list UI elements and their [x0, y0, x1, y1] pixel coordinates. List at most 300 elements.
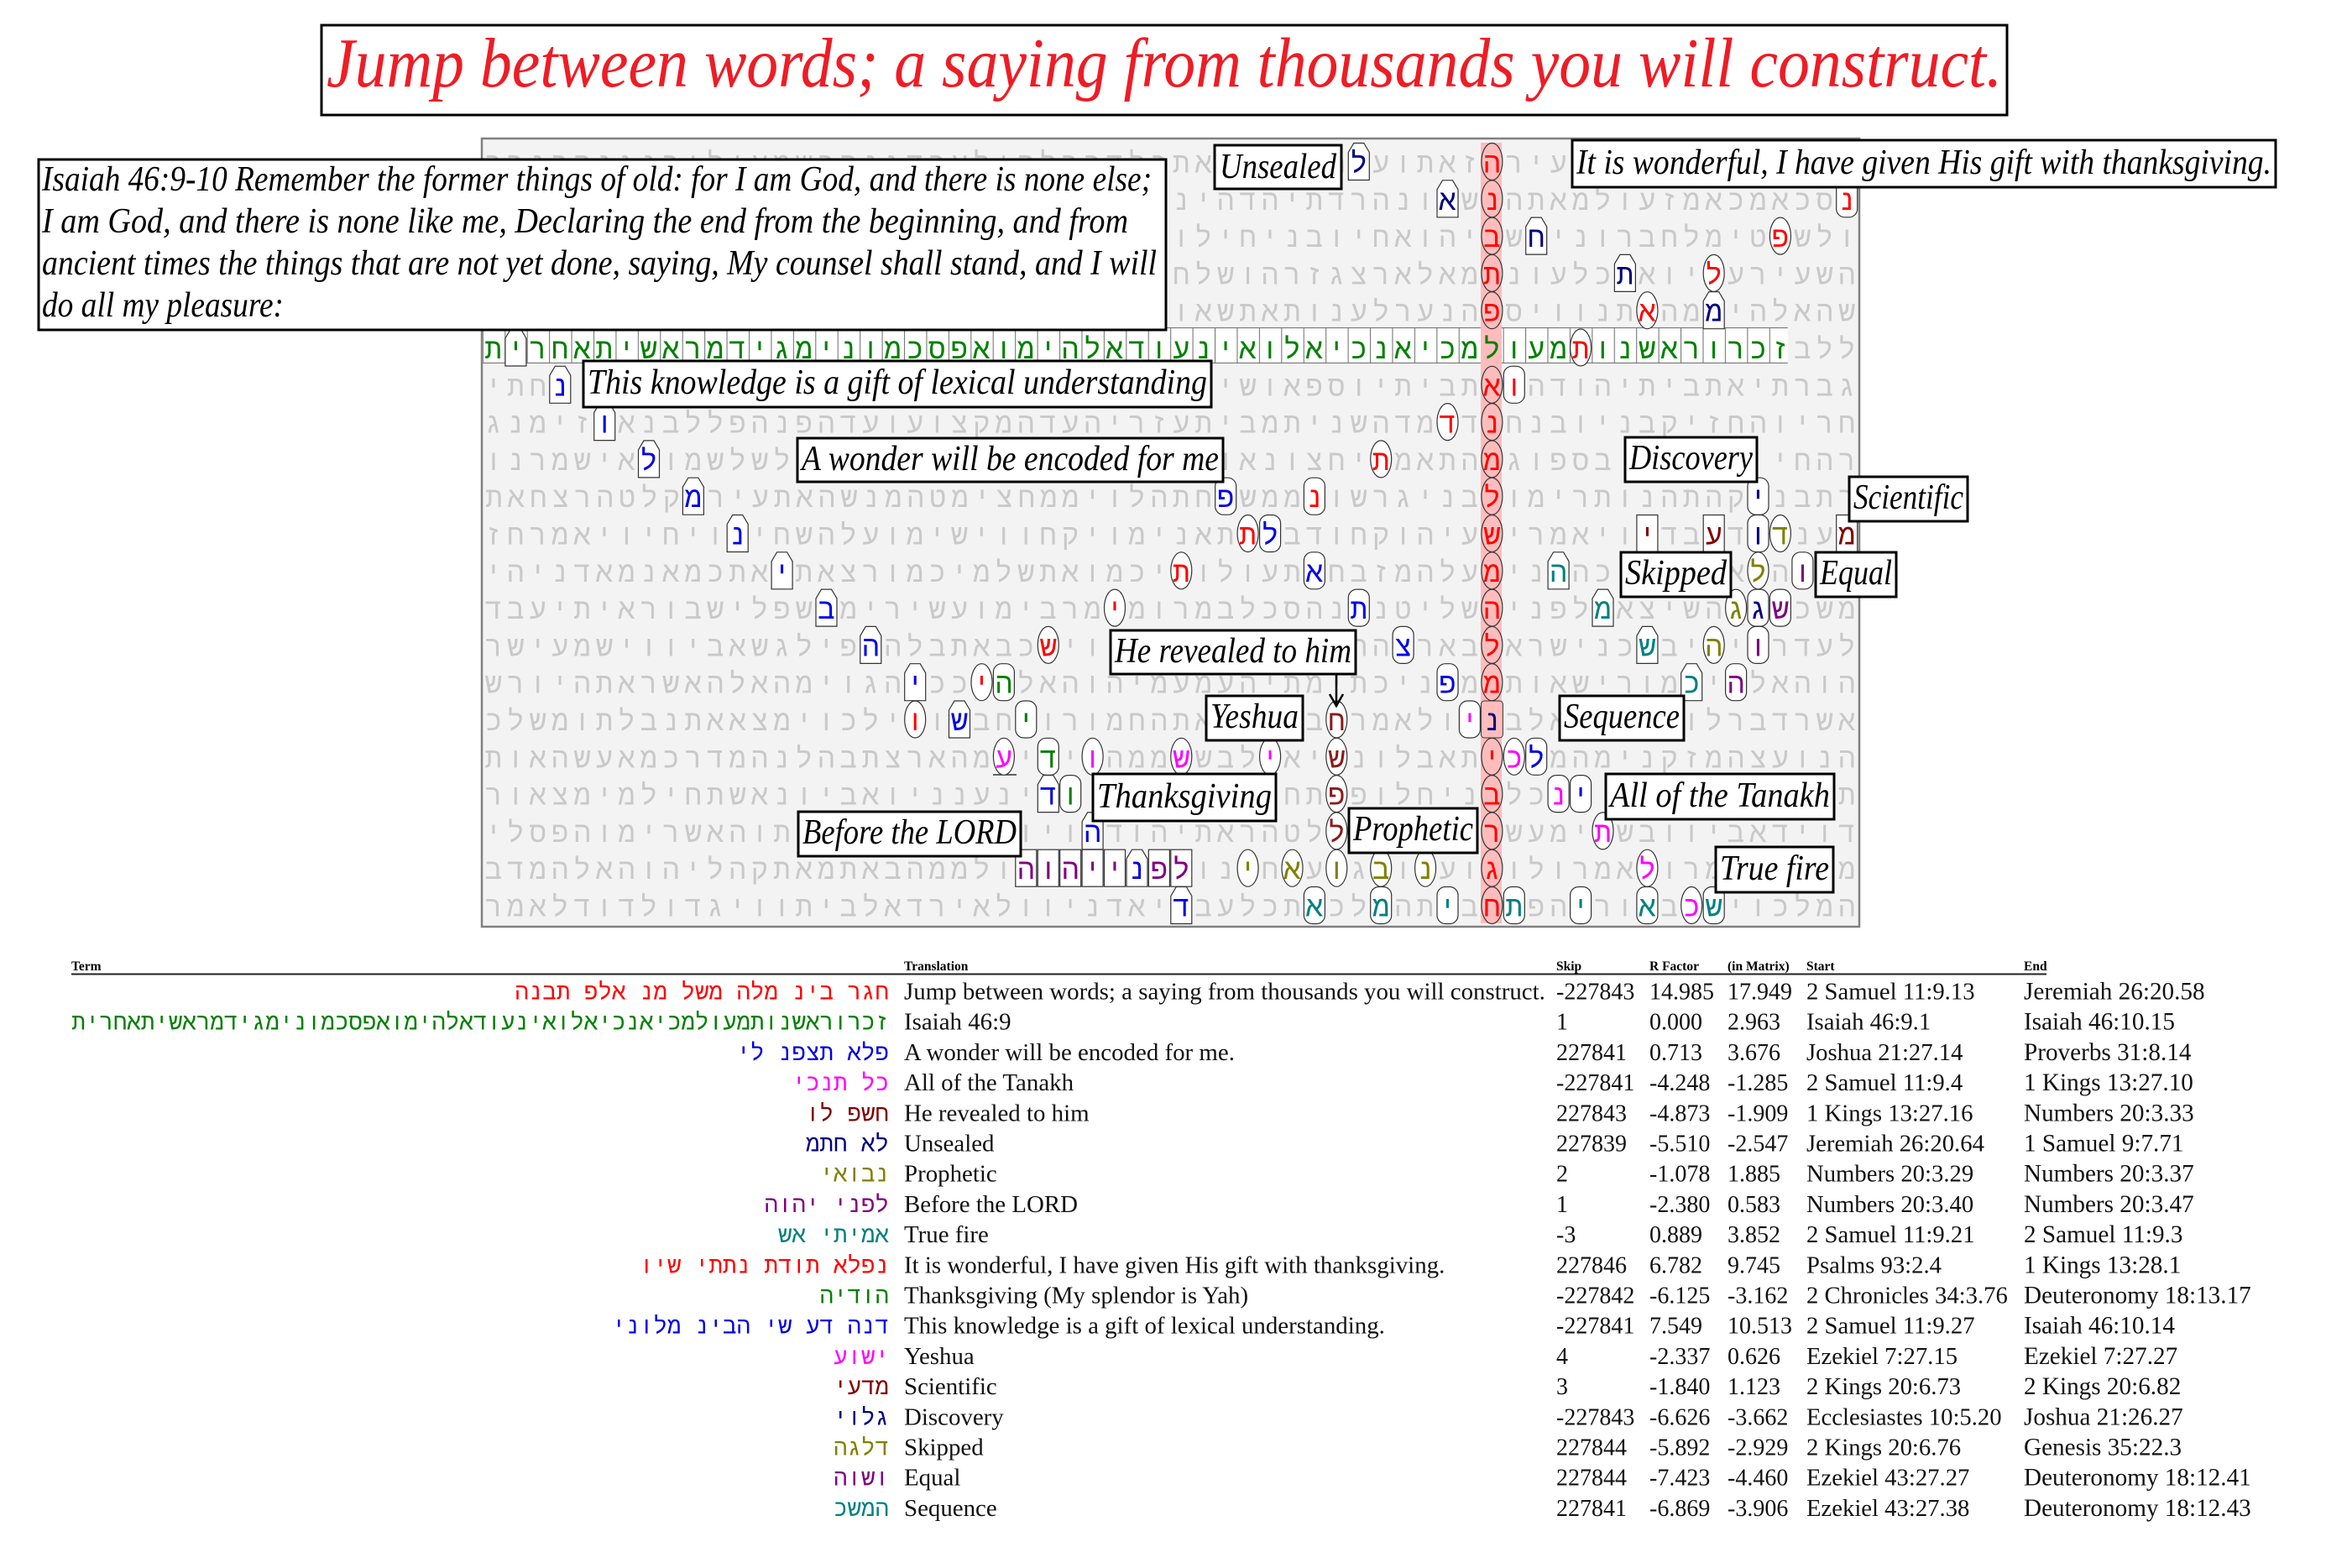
matrix grey letters: מענדודעבדיויאמרי	[1505, 522, 1860, 554]
skip markers: Yeshua and All of the Tanakh (magenta): נ	[1550, 782, 1567, 814]
skip markers: True fire (teal): י	[1572, 893, 1589, 925]
matrix grey letters: ללב	[1794, 335, 1860, 368]
skip markers: Prophetic (olive): א	[1283, 856, 1301, 888]
row: Isaiah 46:9	[71, 1009, 2175, 1037]
skip markers: Skipped (olive): ל	[1749, 558, 1767, 591]
skip markers: Jump between words (red)	[905, 180, 1858, 740]
skip markers: A wonder (blue): צ	[1394, 633, 1412, 665]
row: Scientific: -1.840	[1649, 1374, 1710, 1400]
row: Yeshua: Ezekiel 7:27.15	[1806, 1343, 1957, 1370]
row: Jump between words: 2 Samuel 11:9.13	[1806, 979, 1975, 1006]
skip markers: Jump between words (red): ד	[1439, 410, 1456, 442]
row: Unsealed: 1 Samuel 9:7.71	[2024, 1130, 2184, 1157]
row: He revealed: 227843	[1556, 1100, 1627, 1126]
row: Discovery: Discovery	[904, 1403, 1004, 1430]
skip markers: This knowledge (blue): ב	[818, 596, 835, 628]
row: True fire: 0.889	[1649, 1222, 1702, 1248]
skip markers: True fire (teal): י	[1439, 893, 1456, 925]
row: Isaiah 46:9: 1	[1556, 1010, 1568, 1036]
skip markers: Prophetic (olive): י	[1239, 856, 1257, 888]
skip markers: Before the LORD (purple): ה	[1062, 856, 1079, 888]
row: Before the LORD: -2.380	[1649, 1192, 1710, 1218]
row: It is wonderful: נפלא תודת נתתי שיו	[640, 1254, 889, 1280]
skip markers: He revealed to him (maroon)	[1326, 701, 1347, 851]
skip markers: Before the LORD (purple): י	[1084, 856, 1101, 888]
skip markers: Sequence (teal): ה	[1550, 559, 1567, 591]
row: Equal: 227844	[1556, 1466, 1627, 1492]
row: Equal	[834, 1465, 2251, 1493]
skip markers: Jump between words (red): ש	[1040, 633, 1057, 665]
label: This knowledge: This knowledge is a gift of lexical understanding	[588, 363, 1207, 402]
skip markers: It is wonderful (red, central column): ל	[1483, 632, 1501, 665]
skip markers: A wonder (blue): ל	[1262, 520, 1278, 554]
row of Isaiah 46:9 cells: זכרוראשנותמעולמכיאנכיאלואינעודאלהימואפסכמונימגידמראשיתאחרית	[485, 335, 1794, 368]
skip markers: Thanksgiving (green): ד	[1040, 745, 1057, 776]
row: Unsealed	[806, 1130, 2184, 1158]
row: Sequence: Deuteronomy 18:12.43	[2024, 1495, 2251, 1522]
row: Yeshua: ישוע	[834, 1346, 889, 1372]
matrix grey letters: מרולאמרולו	[1506, 855, 1728, 888]
skip markers: Thanksgiving (green): ה	[996, 671, 1012, 703]
row: Thanksgiving: Thanksgiving (My splendor is Yah)	[904, 1283, 1248, 1309]
skip markers: Scientific (maroon)	[1637, 515, 1858, 554]
label: Equal: Equal	[1819, 554, 1892, 593]
matrix grey letters: מאלארצגזרהושלח	[1173, 260, 1483, 293]
skip markers: Scientific (maroon): מ	[1838, 522, 1855, 554]
matrix grey letters: נחתי	[485, 373, 574, 405]
row: This knowledge: Isaiah 46:10.14	[2024, 1313, 2175, 1340]
skip markers: It is wonderful (red, central column): ב	[1483, 224, 1501, 256]
row: Sequence: -6.869	[1649, 1496, 1710, 1522]
callout: Isaiah 46:9-10 quotation: ancient times the things that are not yet done, saying, My counsel shall stand, and I will	[42, 244, 1157, 283]
matrix grey letters: שליטנתנהסכלבמרומימרבימועשירימבשפלישבוראיתיעבד	[485, 595, 1483, 628]
skip markers: Jump between words (red): פ	[1772, 224, 1789, 256]
skip markers: A wonder (blue): נ	[1483, 708, 1501, 740]
row: Discovery: Ecclesiastes 10:5.20	[1806, 1403, 2002, 1430]
row: This knowledge: -227841	[1556, 1314, 1634, 1340]
row: Discovery: -227843	[1556, 1404, 1634, 1430]
row: Yeshua: 0.626	[1728, 1344, 1780, 1370]
skip markers: It is wonderful (red, central column): ר	[1483, 819, 1501, 851]
row: Scientific	[834, 1373, 2181, 1402]
label: Sequence: Sequence	[1564, 698, 1680, 736]
skip markers: This knowledge (blue): ה	[862, 633, 880, 665]
skip markers: Skipped (olive)	[1703, 515, 1790, 665]
skip markers: knowledge letters over the LORD row (blue)	[1082, 813, 1192, 925]
row: A wonder: A wonder will be encoded for me.	[904, 1039, 1235, 1066]
skip markers: Sequence (teal)	[1548, 552, 1702, 703]
skip markers: Unsealed (navy): א	[1439, 187, 1456, 219]
skip markers: True fire (teal): ש	[1705, 893, 1722, 925]
row: Skipped: -5.892	[1649, 1435, 1710, 1461]
skip markers: Before the LORD (purple)	[1016, 849, 1192, 888]
skip markers: Skipped (olive): ד	[1772, 522, 1789, 554]
row: True fire	[778, 1221, 2182, 1250]
skip markers: Before the LORD (purple): ו	[1040, 856, 1057, 888]
row: Yeshua: 4	[1556, 1344, 1568, 1370]
row: Jump between words: 17.949	[1728, 979, 1792, 1006]
label: A wonder: A wonder will be encoded for me	[799, 440, 1219, 478]
skip markers: Skipped (olive): ג	[1728, 596, 1744, 628]
row: Yeshua: Ezekiel 7:27.27	[2024, 1343, 2177, 1370]
skip markers: Discovery (navy)	[1748, 478, 1769, 628]
skip markers: A wonder (blue): ת	[1351, 596, 1367, 628]
row: He revealed: -1.909	[1728, 1100, 1788, 1126]
row: All of the Tanakh: 2 Samuel 11:9.4	[1806, 1069, 1963, 1096]
skip markers: Yeshua and All of the Tanakh (magenta): י	[1461, 708, 1478, 740]
matrix grey letters: תביתיוספאושי	[1217, 373, 1483, 405]
row: Equal: Ezekiel 43:27.27	[1806, 1465, 1969, 1492]
row: He revealed: He revealed to him	[904, 1100, 1090, 1126]
skip markers: Discovery (navy): י	[1749, 484, 1767, 516]
skip markers: Jump between words (red): ת	[1572, 336, 1589, 368]
skip markers: Prophetic (olive): ב	[1372, 856, 1389, 888]
row: Equal: Equal	[904, 1465, 960, 1492]
row: Thanksgiving: 2 Chronicles 34:3.76	[1806, 1283, 2008, 1309]
skip markers: Scientific (maroon): ע	[1705, 522, 1722, 554]
row: Discovery: -3.662	[1728, 1404, 1788, 1430]
table header: R Factor	[1649, 959, 1699, 974]
row: This knowledge: 2 Samuel 11:9.27	[1806, 1313, 1975, 1340]
row: Jump between words: Jeremiah 26:20.58	[2024, 979, 2205, 1006]
row: Discovery: Joshua 21:26.27	[2024, 1403, 2183, 1430]
matrix grey letters: הוהאלהיכמורישאות	[1505, 670, 1860, 703]
skip markers: It is wonderful (red, central column): ה	[1483, 596, 1501, 628]
matrix grey letters: דנוהלא	[1728, 558, 1860, 591]
matrix grey letters: ניחלופפתח	[1283, 781, 1483, 814]
row: Sequence: Sequence	[904, 1495, 997, 1522]
matrix grey letters: השעירעליואתכלעונ	[1505, 260, 1860, 293]
matrix grey letters: אלב	[1505, 707, 1572, 740]
label: Thanksgiving: Thanksgiving	[1097, 777, 1272, 816]
matrix grey letters: הנועצהמזקנימהמלכ	[1505, 744, 1860, 776]
row: It is wonderful: It is wonderful, I have given His gift with thanksgiving.	[904, 1252, 1445, 1278]
row: Before the LORD: Numbers 20:3.40	[1806, 1191, 1973, 1218]
row: Equal: -7.423	[1649, 1466, 1710, 1492]
row: Skipped: 227844	[1556, 1435, 1627, 1461]
label: Before the LORD: Before the LORD	[802, 813, 1017, 852]
row: All of the Tanakh: -4.248	[1649, 1070, 1710, 1096]
skip markers: Unsealed (navy): מ	[1705, 299, 1722, 331]
arrow from label to marker	[1330, 674, 1343, 706]
skip markers: It is wonderful (red, central column): י	[1483, 745, 1501, 776]
skip markers: Jump between words (red): א	[1639, 299, 1656, 331]
skip markers: Sequence (teal): ש	[1639, 633, 1656, 665]
row: A wonder: Proverbs 31:8.14	[2024, 1039, 2192, 1066]
row: Prophetic: 2	[1556, 1162, 1568, 1188]
skip markers: True fire (teal): ת	[1506, 893, 1523, 925]
callout: Isaiah 46:9-10 quotation: do all my pleasure:	[42, 286, 284, 325]
row: Prophetic: נבואי	[819, 1163, 889, 1189]
skip markers: A wonder (blue): פ	[1439, 671, 1456, 703]
row: True fire: 2 Samuel 11:9.3	[2024, 1221, 2182, 1248]
row: It is wonderful: 6.782	[1649, 1252, 1702, 1278]
skip markers: Prophetic (olive): נ	[1417, 856, 1434, 888]
row: Scientific: 2 Kings 20:6.73	[1806, 1373, 1961, 1400]
row: True fire: 3.852	[1728, 1222, 1780, 1248]
row: This knowledge: דנה דע שי הבינ מלוני	[612, 1315, 889, 1341]
row: He revealed	[806, 1100, 2194, 1128]
matrix grey letters: אתהחמורויחבשווילכוימצאאתנבלתומשלכ	[485, 707, 1217, 740]
skip markers: Yeshua and All of the Tanakh (magenta): ע	[996, 745, 1012, 776]
row: Unsealed: -5.510	[1649, 1132, 1710, 1157]
skip markers: A wonder (blue): י	[1572, 782, 1589, 814]
skip markers: It is wonderful (red, central column)	[1482, 143, 1503, 925]
skip markers: Yeshua and All of the Tanakh (magenta): ו	[1084, 745, 1101, 776]
skip markers: True fire (teal): א	[1306, 893, 1324, 925]
row: All of the Tanakh: All of the Tanakh	[904, 1069, 1074, 1096]
label: Prophetic: Prophetic	[1352, 810, 1473, 849]
row: Isaiah 46:9: 0.000	[1649, 1010, 1702, 1036]
skip markers: Jump between words (red): נ	[1306, 484, 1323, 516]
skip markers: It is wonderful (red, central column): ל	[1483, 483, 1501, 516]
matrix grey letters: מחצימטהמנשהאתעירמקלטהרצחאת	[485, 483, 1063, 516]
skip markers: This knowledge (blue): מ	[685, 484, 702, 516]
row: He revealed: חשפ לו	[806, 1102, 889, 1128]
row: A wonder: Joshua 21:27.14	[1806, 1039, 1963, 1066]
matrix grey letters: עלהמזבחאתעולותיכמואתשלמיכמורצאתיאתכמאנמאדניהי	[485, 558, 1483, 591]
row: It is wonderful: 1 Kings 13:28.1	[2024, 1252, 2181, 1278]
matrix grey letters: זאתועלהדבריםאתכלדברלהולעבדגנהבשמעולובנגנהבנרב	[485, 149, 1483, 181]
matrix grey letters: יולאמרחב	[1306, 707, 1483, 740]
skip markers: This knowledge (blue): י	[773, 559, 791, 591]
row: Skipped: Skipped	[904, 1434, 984, 1461]
matrix grey letters: לשלשמולאישמרנו	[485, 447, 796, 479]
row: Skipped: דלגה	[834, 1437, 889, 1462]
skip markers: It is wonderful (red, central column): ה	[1483, 149, 1501, 181]
row: Jump between words: חגר בינ מלה משל מנ אלפ תבנה	[515, 980, 889, 1007]
skip markers: He revealed to him (maroon): ש	[1328, 745, 1346, 776]
skip markers: It is wonderful (red, central column): א	[1483, 373, 1501, 405]
row: All of the Tanakh: 1 Kings 13:27.10	[2024, 1069, 2193, 1096]
skip markers: Jump between words (red): ת	[1239, 522, 1257, 554]
matrix grey letters: עיהוקחודבלתתאנימויקחווישימועלהשחינויחיויאמרחז	[485, 520, 1483, 554]
skip markers: It is wonderful (red, central column): מ	[1483, 671, 1501, 703]
row: Scientific: Scientific	[904, 1373, 997, 1400]
matrix grey letters: הנערלענותאתשאו	[1173, 298, 1483, 331]
row: True fire: True fire	[904, 1221, 989, 1248]
table header: Skip	[1556, 959, 1581, 974]
skip markers: Equal (purple): ו	[1794, 559, 1811, 591]
skip markers: Yeshua and All of the Tanakh (magenta): ת	[1594, 819, 1612, 851]
skip markers: It is wonderful (red, central column): פ	[1483, 299, 1501, 331]
row: Skipped: Genesis 35:22.3	[2024, 1434, 2182, 1461]
skip markers: Unsealed (navy): ת	[1617, 261, 1633, 293]
matrix grey letters: מפניכתימתיהעמעמיהוהאלהיככיהגוימהאלהאשראתהיורש	[485, 670, 1483, 703]
matrix grey letters: ולשפטימלחברוניחש	[1505, 223, 1860, 256]
skip markers: Jump between words (red): ו	[1506, 373, 1523, 405]
row: Jump between words: -227843	[1556, 979, 1634, 1006]
row: Before the LORD: Before the LORD	[904, 1191, 1078, 1218]
row: Unsealed: Jeremiah 26:20.64	[1806, 1130, 1984, 1157]
matrix grey letters: שאונהרדתיהדהינש	[1151, 187, 1483, 219]
row: Isaiah 46:9: Isaiah 46:9.1	[1806, 1009, 1931, 1036]
matrix grey letters: בניגרשונממשפחתהלוימ	[1062, 483, 1483, 516]
skip markers: Discovery (navy): ג	[1749, 596, 1767, 628]
skip markers: He revealed to him (maroon): ח	[1328, 708, 1346, 740]
matrix grey letters: שמעישראלאתהיועיר	[1505, 149, 1860, 181]
row: Thanksgiving: הודיה	[819, 1284, 889, 1311]
skip markers: A wonder (blue): א	[1306, 559, 1324, 591]
skip markers: Scientific (maroon): י	[1639, 522, 1656, 554]
callout: Isaiah 46:9-10 quotation: Isaiah 46:9-10 Remember the former things of old: for I am God, and there is none else;	[41, 160, 1152, 199]
skip markers: Prophetic (olive): ו	[1328, 856, 1346, 888]
skip markers: Prophetic (olive)	[1237, 849, 1436, 888]
row: Scientific: 3	[1556, 1374, 1568, 1400]
skip markers: This knowledge (blue): ל	[640, 447, 657, 479]
skip markers: Sequence (teal): מ	[1594, 596, 1612, 628]
matrix grey letters: התאמתיחצונאו	[1217, 447, 1483, 479]
skip markers: Before the LORD (purple): י	[1106, 856, 1123, 888]
row: True fire: 2 Samuel 11:9.21	[1806, 1221, 1975, 1248]
skip markers: Jump between words (red): נ	[1838, 187, 1855, 219]
row: Thanksgiving: -6.125	[1649, 1283, 1710, 1309]
matrix grey letters	[485, 149, 1860, 925]
table header: Term	[71, 959, 102, 974]
row: Sequence: -3.906	[1728, 1496, 1788, 1522]
row: Before the LORD: לפני יהוה	[764, 1194, 889, 1220]
matrix grey letters: משכשגגהשיצאמלפני	[1505, 595, 1860, 628]
matrix grey letters: בארצהה	[1350, 633, 1483, 665]
row: Scientific: 2 Kings 20:6.82	[2024, 1373, 2181, 1400]
skip markers: Yeshua and All of the Tanakh (magenta): כ	[1506, 745, 1523, 776]
matrix grey letters: ינכל	[1506, 781, 1594, 814]
matrix grey letters: מ	[1838, 856, 1860, 888]
skip markers: Thanksgiving (green)	[505, 329, 1081, 814]
row: Unsealed: לא חתמ	[806, 1133, 889, 1158]
label: Unsealed: Unsealed	[1220, 148, 1337, 186]
skip markers: It is wonderful (red, central column): ג	[1483, 856, 1501, 888]
matrix grey letters: בספוג	[1506, 447, 1617, 479]
skip markers: Jump between words (red): י	[973, 671, 991, 703]
row: Before the LORD: 0.583	[1728, 1192, 1780, 1218]
skip markers: True fire (teal): מ	[1372, 893, 1389, 925]
row: Unsealed: Unsealed	[904, 1130, 995, 1157]
skip markers: He revealed to him (maroon): ל	[1328, 818, 1346, 851]
highlighted column band	[1481, 143, 1502, 923]
skip markers: True fire (teal)	[1304, 886, 1724, 925]
row: A wonder: 3.676	[1728, 1040, 1780, 1066]
row: Prophetic: -1.078	[1649, 1162, 1710, 1188]
skip markers: Yeshua and All of the Tanakh (magenta): ש	[1173, 745, 1190, 776]
row: Before the LORD	[764, 1191, 2194, 1220]
row: Before the LORD: 1	[1556, 1192, 1568, 1218]
row: Isaiah 46:9: 2.963	[1728, 1010, 1780, 1036]
skip markers: Unsealed (navy)	[1348, 143, 1724, 331]
skip markers: It is wonderful (red, central column): מ	[1483, 559, 1501, 591]
row: Prophetic: 1.885	[1728, 1162, 1780, 1188]
skip markers: Equal (purple)	[1726, 552, 1813, 703]
skip markers: This knowledge (blue): ש	[951, 708, 968, 740]
row: Prophetic: Numbers 20:3.29	[1806, 1161, 1973, 1188]
callout: Isaiah 46:9-10 quotation	[39, 159, 1166, 330]
skip markers: Jump between words (red): ת	[1372, 447, 1389, 479]
table header: Translation	[904, 959, 969, 974]
row: Equal: ושוה	[834, 1467, 889, 1493]
row: All of the Tanakh: -227841	[1556, 1070, 1634, 1096]
skip markers: knowledge letters over the LORD row (blue): נ	[1128, 856, 1146, 888]
skip markers: This knowledge (blue): ד	[1040, 782, 1057, 814]
skip markers: He revealed to him (maroon): פ	[1328, 782, 1346, 814]
label: He revealed to him: He revealed to him	[1114, 632, 1351, 671]
skip markers: Unsealed (navy): ל	[1351, 149, 1367, 181]
skip markers: Equal (purple): ש	[1772, 596, 1789, 628]
row: Yeshua	[834, 1343, 2177, 1372]
row: Sequence: 227841	[1556, 1496, 1627, 1522]
skip markers: Jump between words (red): ו	[907, 708, 923, 740]
row: Prophetic: Prophetic	[904, 1161, 997, 1188]
matrix grey letters: גברתיאתביתיהודהו	[1505, 373, 1860, 405]
skip markers: This knowledge (blue): ו	[596, 410, 613, 442]
row: Discovery: גלוי	[834, 1406, 889, 1432]
skip markers: It is wonderful (red, central column): ש	[1483, 522, 1501, 554]
row: A wonder	[736, 1039, 2192, 1068]
row: Thanksgiving: Deuteronomy 18:13.17	[2024, 1283, 2251, 1309]
skip markers: knowledge letters over the LORD row (blue): ה	[1084, 819, 1101, 851]
skip markers: Yeshua and All of the Tanakh (magenta): כ	[1683, 893, 1700, 925]
skip markers: True fire (teal): א	[1639, 893, 1656, 925]
row: True fire: אמיתי אש	[778, 1224, 889, 1250]
skip markers: It is wonderful (red, central column): מ	[1483, 447, 1501, 479]
matrix grey letters: וישכבאתבלההפילגשאביווישמעישר	[485, 632, 1106, 665]
matrix grey letters: ת	[1838, 782, 1860, 814]
row: All of the Tanakh	[792, 1069, 2193, 1098]
skip markers: This knowledge (blue): נ	[551, 373, 569, 405]
row: He revealed: 1 Kings 13:27.16	[1806, 1100, 1973, 1126]
skip markers: knowledge letters over the LORD row (blue): ד	[1173, 893, 1190, 925]
matrix grey letters: רהחי	[1772, 447, 1860, 479]
row: Equal: -4.460	[1728, 1466, 1788, 1492]
row: Thanksgiving: -227842	[1556, 1283, 1634, 1309]
label: All of the Tanakh: All of the Tanakh	[1607, 776, 1830, 815]
skip markers: Before the LORD (purple): פ	[1151, 856, 1168, 888]
row: He revealed: -4.873	[1649, 1100, 1710, 1126]
row: True fire: -3	[1556, 1222, 1576, 1248]
matrix grey letters: לעדרויהיבשכנישרא	[1505, 632, 1860, 665]
row: Prophetic: Numbers 20:3.37	[2024, 1161, 2194, 1188]
row: Skipped	[834, 1434, 2182, 1462]
skip markers: It is wonderful (red, central column): ת	[1483, 261, 1501, 293]
skip markers: Yeshua and All of the Tanakh (magenta)	[993, 701, 1702, 925]
skip markers: Unsealed (navy): ח	[1528, 224, 1545, 256]
matrix grey letters: רתבניקהתהנותרימו	[1505, 484, 1860, 516]
row: This knowledge	[612, 1313, 2175, 1341]
skip markers: Skipped (olive): ה	[1705, 633, 1722, 665]
skip markers: A wonder (blue): פ	[1217, 484, 1234, 516]
skip markers: Before the LORD (purple): ל	[1173, 855, 1190, 888]
matrix grey letters: דוידאביוובשתימעש	[1505, 819, 1860, 851]
row: Discovery: -6.626	[1649, 1404, 1710, 1430]
row: Sequence: Ezekiel 43:27.38	[1806, 1495, 1969, 1522]
skip markers: Equal (purple): ה	[1728, 671, 1744, 703]
matrix grey letters: המלכוישכבאוריהפת	[1505, 893, 1860, 925]
row: A wonder: 227841	[1556, 1040, 1627, 1066]
row: Thanksgiving: -3.162	[1728, 1283, 1788, 1309]
title banner: Jump between words; a saying from thousands you will construct.	[327, 24, 2002, 102]
table of terms	[71, 979, 2251, 1524]
row: It is wonderful: 9.745	[1728, 1252, 1780, 1278]
label: True fire: True fire	[1720, 849, 1829, 888]
skip markers: Jump between words (red): י	[1106, 596, 1123, 628]
label: Discovery: Discovery	[1628, 439, 1753, 478]
row: Jump between words: Jump between words; a saying from thousands you will construct.	[904, 979, 1545, 1006]
row: Yeshua: -2.337	[1649, 1344, 1710, 1370]
matrix grey letters: דדמדהשניתמביתעזריהעדהמקצועועדהפנהפללבנאוזימנג	[485, 410, 1483, 442]
row: Jump between words	[515, 979, 2205, 1007]
skip markers: It is wonderful (red, central column): נ	[1483, 187, 1501, 219]
skip markers: This knowledge (blue)	[550, 366, 1058, 814]
row: It is wonderful	[640, 1252, 2181, 1280]
